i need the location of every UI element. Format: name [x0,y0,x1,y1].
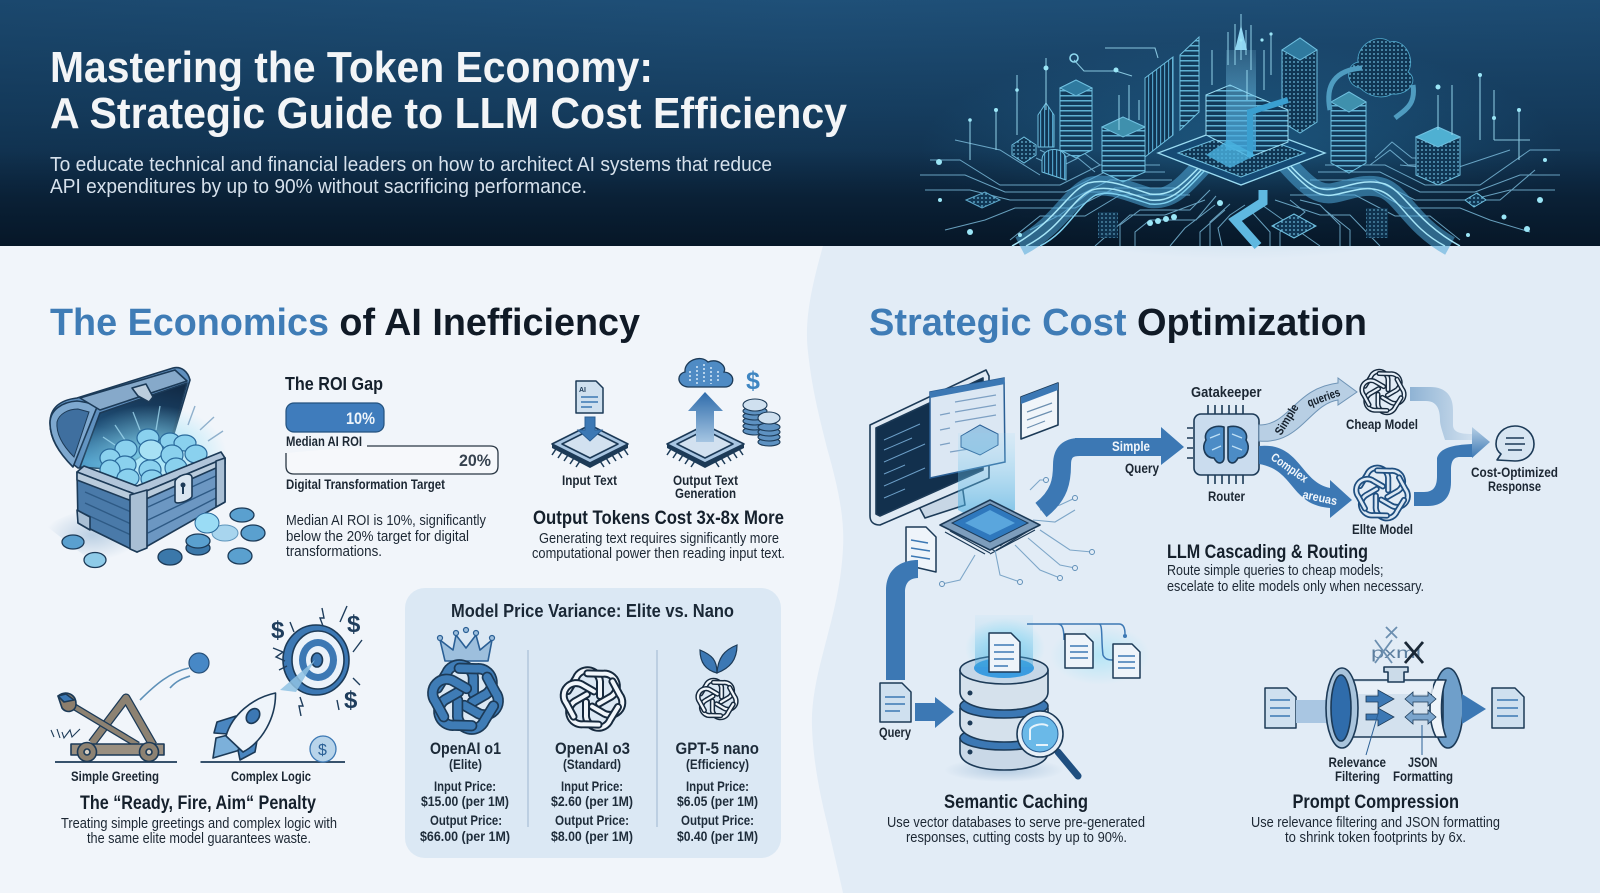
arrow: simple query: Simple [1112,439,1150,454]
heading: gatekeeper: Gatakeeper [1191,385,1262,401]
page background: right panel with wavy edge [807,246,1600,893]
panel: model price variance [405,588,781,858]
icon: compressor pipe [1265,667,1524,755]
text: routing note: escelate to elite models only when necessary. [1167,579,1424,595]
bar: median 10% [286,403,384,432]
heading: output tokens: Output Tokens Cost 3x-8x More [533,507,784,529]
label: router: Router [1208,489,1246,504]
panel: LLM routing [870,366,1558,595]
icon: computer and chip [870,370,1094,586]
icon: output chip [667,359,780,468]
bar: median 10%: 10% [346,409,375,428]
icon: output chip: $ [746,367,760,395]
label: median ROI: Median AI ROI [286,434,362,449]
spires with dots [970,14,1530,160]
icon: crown [438,628,494,661]
text: o3 prices [551,739,633,844]
heading: ROI gap: The ROI Gap [285,374,383,394]
text: ROI note: transformations. [286,544,382,560]
text: output note [532,531,785,562]
icon: leaf [700,645,737,673]
central platform [1158,25,1325,185]
towers [1012,37,1460,185]
icon: rocket and target: $ [347,611,361,638]
icon: treasure chest [45,368,265,568]
text: o3 prices: (Standard) [563,756,621,772]
text: nano prices [676,739,759,844]
title: Mastering the Token Economy: [50,44,653,92]
label: output text: Generation [675,486,736,501]
panel: ROI gap [285,374,498,560]
text: compression note: to shrink token footprints by 6x. [1285,830,1466,846]
column: OpenAI o3 [551,663,633,844]
text: caching note: responses, cutting costs by up to 90%. [906,830,1127,846]
text: o3 prices: Input Price: [561,778,623,794]
illustration: circuit city [0,14,1600,260]
text: compression note: Use relevance filtering and JSON formatting [1251,815,1500,831]
text: ROI note: Median AI ROI is 10%, significantly [286,513,487,529]
panel: ready fire aim [51,606,362,847]
flow ribbons [1012,162,1460,246]
icon: rocket and target: $ [271,617,285,644]
icon: query document [880,683,911,722]
icon: crossed-out tokens [1371,627,1423,663]
text: caching note [887,815,1145,846]
arrow: complex queries branch: Complex [1268,450,1311,486]
icon: rocket and target: $ [344,687,358,714]
label: JSON formatting: Formatting [1393,769,1453,784]
icon: rocket and target: $ [318,742,327,759]
text: o1 prices: (Elite) [449,756,482,772]
label: relevance filtering: Filtering [1335,769,1380,784]
text: o3 prices: $2.60 (per 1M) [551,793,633,809]
cloud of data [1329,39,1414,118]
label: response: Response [1488,479,1541,494]
label: response: Cost-Optimized [1471,465,1558,480]
heading: routing: LLM Cascading & Routing [1167,541,1368,563]
heading: price variance: Model Price Variance: Elite vs. Nano [451,601,734,621]
icon: cached documents [1027,624,1150,685]
arrow: query pipe [886,560,918,680]
text: o1 prices: $66.00 (per 1M) [420,828,510,844]
text: compression note [1251,815,1500,846]
heading: semantic caching: Semantic Caching [944,791,1088,813]
arrow: simple query: Query [1125,461,1159,476]
heading: optimization: Strategic Cost Optimization [869,302,1367,344]
page background: left panel [0,246,1600,893]
icon: elite model [1349,461,1415,525]
icon: magnifying glass [1017,711,1078,776]
arrow: simple query [1075,427,1184,476]
header band [0,0,1600,260]
heading: prompt compression: Prompt Compression [1292,791,1459,813]
icon: input chip [552,381,628,468]
icon: router brain chip [1187,405,1265,484]
text: ROI note: below the 20% target for digital [286,529,469,545]
arrow: simple queries branch: Simple [1272,401,1302,438]
text: nano prices: GPT-5 nano [676,739,759,758]
label: JSON formatting: JSON [1408,755,1438,770]
panel: output token cost [532,359,785,562]
text: nano prices: $0.40 (per 1M) [677,828,758,844]
text: output note: Generating text requires significantly more [539,531,779,547]
text: o1 prices: $15.00 (per 1M) [421,793,509,809]
label: complex logic: Complex Logic [231,769,311,784]
text: ROI note [286,513,487,560]
panel: prompt compression [1251,627,1524,846]
text: o3 prices: Output Price: [555,812,629,828]
arrow: simple queries branch [1259,378,1357,441]
title: A Strategic Guide to LLM Cost Efficiency [50,90,848,138]
panel: semantic caching [879,560,1150,846]
icon: standard logo [556,663,630,735]
icon: nano logo [693,676,741,722]
arrow: simple queries branch: queries [1305,385,1342,410]
text: routing note [1167,563,1424,595]
label: cheap model: Cheap Model [1346,417,1418,432]
arrow: merge to response [1410,387,1490,506]
bar: target 20%: 20% [459,451,491,470]
text: nano prices: $6.05 (per 1M) [677,793,758,809]
text: o3 prices: $8.00 (per 1M) [551,828,633,844]
text: output note: computational power then reading input text. [532,546,785,562]
text: o1 prices: Output Price: [430,812,502,828]
arrow: complex queries branch: areuas [1301,487,1339,508]
label: input text: Input Text [562,473,617,488]
subtitle [50,154,772,198]
text: o1 prices: OpenAI o1 [430,739,501,758]
icon: elite logo [424,657,507,737]
label: response [1471,465,1558,494]
label: target: Digital Transformation Target [286,477,445,492]
title [50,44,848,138]
icon: rocket and target [200,606,362,762]
label: relevance filtering [1328,755,1386,784]
text: o1 prices [420,739,510,844]
text: penalty note: Treating simple greetings and complex logic with [61,816,337,832]
label: output text: Output Text [673,473,738,488]
column: GPT-5 nano [676,645,759,844]
label: output text [673,473,738,501]
label: query: Query [879,725,911,740]
subtitle: API expenditures by up to 90% without sacrificing performance. [50,176,587,198]
label: elite model: Ellte Model [1352,522,1413,537]
text: o3 prices: OpenAI o3 [555,739,630,758]
icon: catapult [51,653,209,762]
column: OpenAI o1 [420,628,510,844]
icon: input chip: AI [579,387,586,394]
text: caching note: Use vector databases to serve pre-generated [887,815,1145,831]
heading: penalty: The “Ready, Fire, Aim“ Penalty [80,792,316,814]
subtitle: To educate technical and financial leaders on how to architect AI systems that reduce [50,154,772,176]
arrow: into database [915,697,954,728]
text: penalty note: the same elite model guarantees waste. [87,831,311,847]
arrow: complex queries branch [1259,446,1352,518]
text: nano prices: Output Price: [681,812,754,828]
icon: cheap model [1356,366,1410,418]
heading: economics: The Economics of AI Inefficiency [50,302,640,344]
text: nano prices: Input Price: [686,778,749,794]
icon: database [944,615,1064,782]
text: routing note: Route simple queries to cheap models; [1167,563,1384,579]
text: penalty note [61,816,337,847]
text: nano prices: (Efficiency) [686,756,749,772]
label: JSON formatting [1393,755,1453,784]
label: relevance filtering: Relevance [1328,755,1386,770]
icon: crossed-out tokens: pxml [1371,645,1421,662]
bar: target 20% [286,446,498,474]
text: o1 prices: Input Price: [434,778,496,794]
icon: response bubble [1496,426,1534,461]
label: simple greeting: Simple Greeting [71,769,159,784]
